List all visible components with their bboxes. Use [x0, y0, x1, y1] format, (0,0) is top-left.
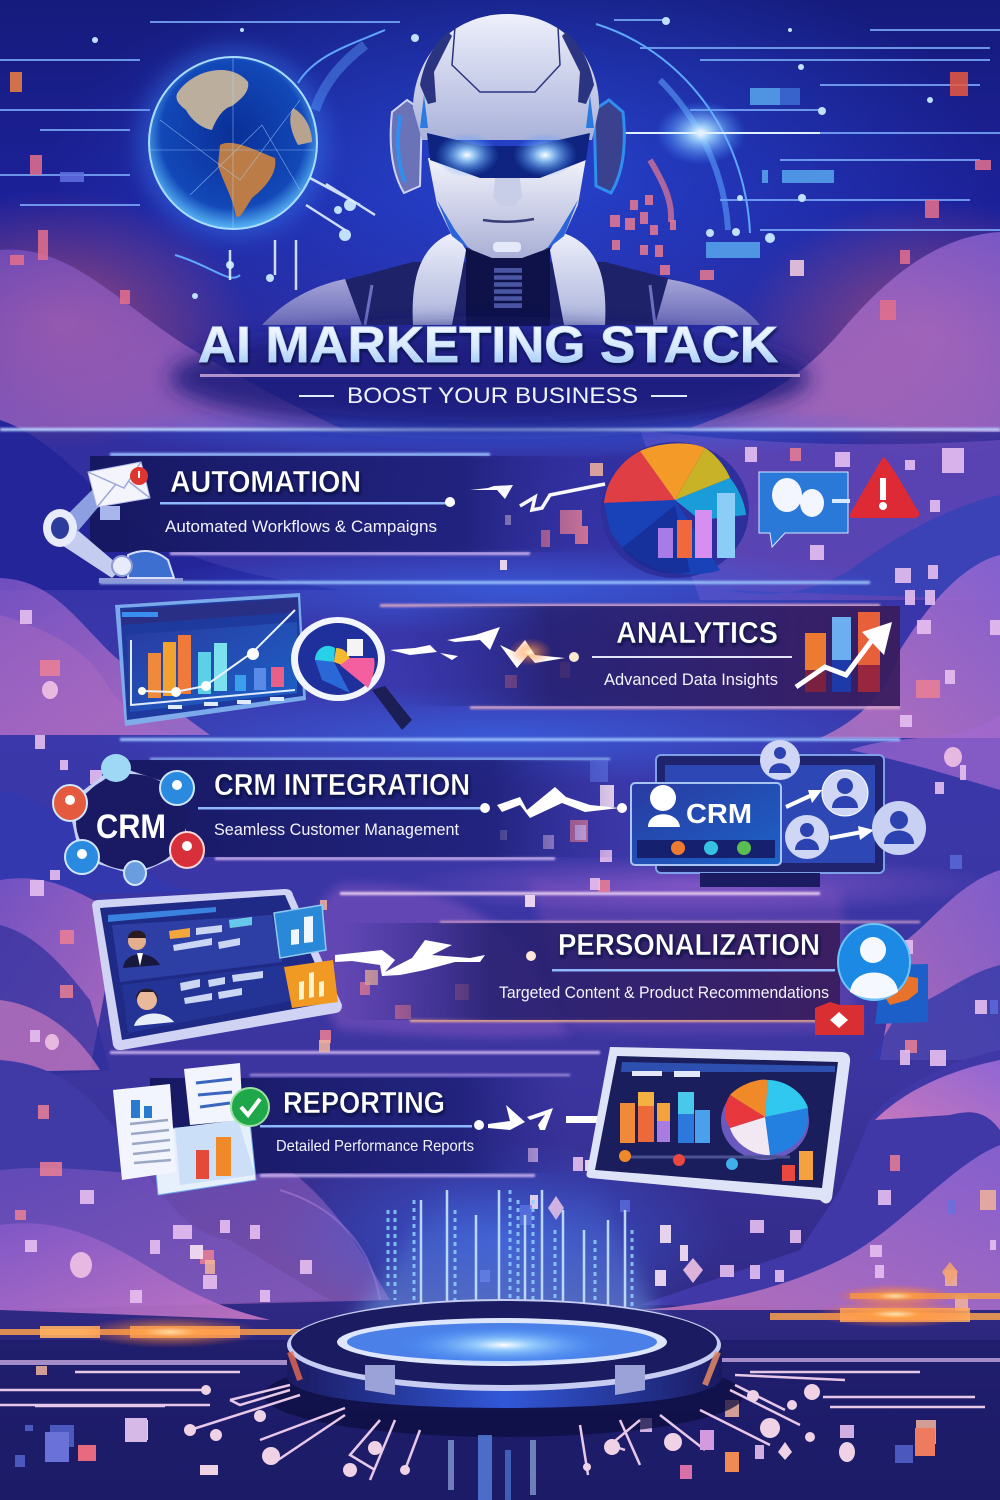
globe — [137, 47, 329, 239]
reporting documents — [113, 1063, 269, 1195]
crm panel — [110, 760, 620, 857]
analytics heading: ANALYTICS — [616, 615, 778, 650]
connector lines from globe — [230, 178, 375, 290]
section: reporting — [113, 1047, 850, 1204]
continent: north america — [176, 70, 248, 130]
automation connector arrow — [445, 484, 605, 510]
background glowing horizontal lines — [0, 428, 1000, 1177]
section: personalization — [92, 889, 928, 1050]
analytics description: Advanced Data Insights — [604, 670, 778, 689]
circuit nodes — [45, 1384, 935, 1500]
analytics connector arrow — [390, 627, 579, 668]
robot collar — [413, 232, 466, 325]
crm connector arrow — [480, 787, 627, 818]
robot face — [428, 158, 586, 258]
automation envelope icon — [88, 462, 150, 507]
pedestal — [264, 1299, 744, 1437]
reporting description: Detailed Performance Reports — [276, 1138, 474, 1155]
crm heading: CRM INTEGRATION — [214, 767, 470, 802]
profile person two — [134, 989, 174, 1026]
automation heading: AUTOMATION — [170, 464, 361, 499]
personalization chart tiles — [274, 905, 338, 1008]
scattered data squares — [15, 447, 1000, 1477]
crm hub icon — [53, 754, 204, 885]
top side lines and dots — [0, 17, 1000, 320]
personalization description: Targeted Content & Product Recommendations — [499, 983, 829, 1002]
analytics magnifier — [291, 617, 412, 730]
continent: south america — [218, 143, 275, 217]
background waves — [0, 232, 1000, 1340]
automation robot arm icon — [43, 490, 183, 583]
automation chat icon — [759, 472, 850, 547]
automation warning icon — [850, 457, 919, 518]
personalization panel — [340, 923, 840, 1020]
arcs behind robot — [175, 24, 750, 278]
robot mouth — [483, 219, 534, 222]
personalization user icon — [815, 924, 928, 1035]
profile person one — [123, 930, 160, 968]
subtitle: BOOST YOUR BUSINESS — [347, 383, 638, 408]
data streams — [340, 1190, 670, 1350]
round and diamond particles — [42, 681, 962, 1285]
automation description: Automated Workflows & Campaigns — [165, 517, 437, 536]
robot — [262, 14, 760, 326]
section: automation — [43, 442, 919, 583]
automation pie chart with bars — [601, 442, 749, 578]
crm avatars network — [760, 740, 926, 859]
crm monitor — [631, 755, 884, 887]
robot helmet — [413, 14, 599, 140]
reporting tablet dashboard — [586, 1047, 850, 1204]
personalization heading: PERSONALIZATION — [558, 927, 820, 962]
analytics browser chart — [115, 593, 306, 726]
analytics panel — [400, 606, 900, 706]
section: analytics — [115, 593, 900, 730]
personalization profile card — [92, 889, 342, 1050]
title dark backing — [170, 326, 810, 430]
reporting heading: REPORTING — [283, 1085, 445, 1120]
crm card label: CRM — [686, 798, 752, 829]
robot shoulders — [262, 262, 760, 325]
circuit traces — [0, 1372, 985, 1480]
robot ear pieces — [391, 100, 422, 193]
section: crm integration — [53, 740, 926, 887]
crm description: Seamless Customer Management — [214, 820, 459, 839]
orange glow lines — [0, 1284, 1000, 1365]
robot nose — [493, 178, 522, 206]
analytics bar icon — [796, 612, 892, 692]
reporting panel — [150, 1078, 570, 1173]
reporting connector arrow — [474, 1105, 602, 1130]
robot neck — [466, 248, 550, 326]
crm hub label: CRM — [96, 808, 166, 846]
lens flare — [620, 101, 820, 165]
continent: africa edge — [290, 108, 312, 145]
subtitle — [200, 374, 800, 408]
automation panel — [90, 456, 590, 552]
personalization connector arrow — [335, 940, 536, 976]
robot visor — [427, 133, 590, 178]
title: AI MARKETING STACK — [198, 316, 778, 373]
